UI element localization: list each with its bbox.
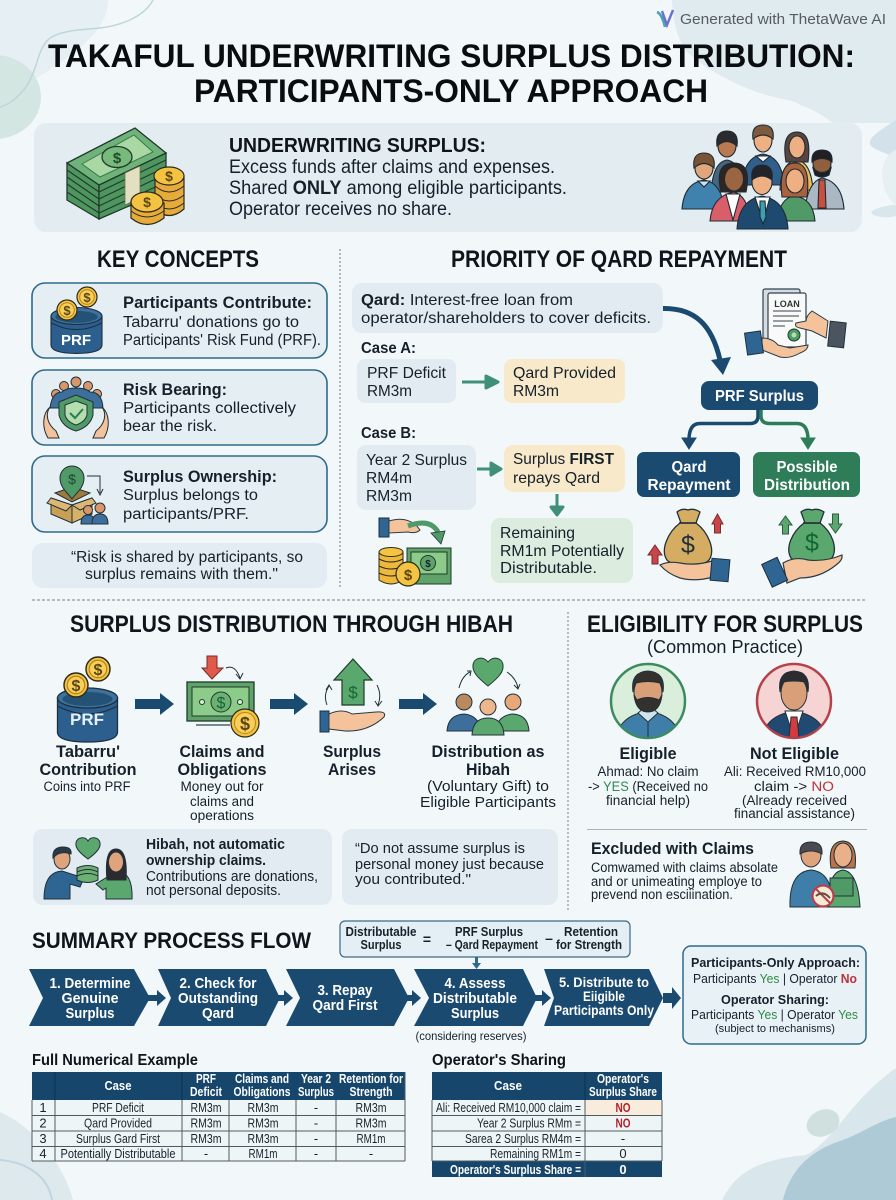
icon: excluded pair	[790, 841, 860, 907]
heading: (Common Practice)	[647, 637, 803, 657]
step 2: 2. Check for	[180, 975, 257, 992]
node: possible distribution	[753, 452, 860, 497]
callout: risk quote: surplus remains with them."	[85, 566, 278, 583]
icon: cash and coins: $	[143, 194, 151, 210]
arrows: branches to repayment and distribution	[682, 410, 815, 449]
formula box: Surplus	[360, 938, 402, 952]
watermark: Generated with ThetaWave AI	[680, 11, 886, 28]
table: Qard Provided	[84, 1116, 152, 1130]
table: RM3m	[248, 1116, 278, 1130]
step: claims and obligations	[178, 656, 266, 823]
heading: Operator's Sharing	[432, 1052, 566, 1069]
icon: loan document and hands: LOAN	[774, 299, 800, 309]
card: participants contribute	[32, 283, 327, 358]
step 2	[158, 969, 280, 1026]
case A	[357, 340, 625, 403]
heading: KEY CONCEPTS	[97, 246, 259, 273]
definition: qard	[352, 283, 663, 333]
arrow	[147, 990, 166, 1006]
card text: Participants' Risk Fund (PRF).	[123, 332, 321, 349]
table: -	[314, 1131, 318, 1146]
formula box: Distributable	[346, 925, 417, 939]
node: possible distribution: Distribution	[764, 477, 850, 494]
table: Ali: Received RM10,000 claim =	[436, 1100, 581, 1115]
panel: surplus distribution through hibah	[33, 611, 558, 905]
icon: group of participants	[682, 125, 844, 229]
node: qard repayment: Repayment	[648, 477, 731, 494]
icon: hand placing cash and coins: $	[404, 567, 413, 584]
step: claims and obligations: $	[240, 714, 250, 734]
text: not eligible: (Already received	[742, 793, 847, 808]
table: Case	[494, 1079, 522, 1093]
table: RM3m	[190, 1116, 222, 1130]
table: RM3m	[356, 1100, 386, 1115]
case B: repays Qard	[513, 470, 600, 487]
arrow	[399, 693, 437, 715]
table: RM3m	[356, 1116, 386, 1130]
table: -	[369, 1146, 373, 1161]
step 5: 5. Distribute to	[559, 975, 649, 990]
table: -	[204, 1146, 208, 1161]
formula box: PRF Surplus	[455, 925, 523, 939]
table: Case	[104, 1079, 132, 1093]
arrow	[663, 987, 681, 1009]
table: Operator's Surplus Share =	[450, 1162, 581, 1177]
table: -	[314, 1146, 318, 1161]
table: Year 2	[301, 1072, 331, 1086]
text: not eligible: Ali: Received RM10,000	[724, 764, 866, 779]
case B: Case B:	[361, 425, 416, 442]
icon: PRF fund with coins	[51, 287, 102, 353]
heading	[587, 611, 863, 657]
step: claims and obligations: Claims and	[180, 742, 264, 761]
text: eligible: financial help)	[606, 793, 690, 808]
title	[48, 38, 855, 109]
step 3: 3. Repay	[318, 982, 373, 999]
card: risk bearing	[32, 370, 327, 445]
text: not eligible: Not Eligible	[750, 744, 839, 763]
step: claims and obligations: Money out for	[180, 779, 264, 794]
table: RM3m	[248, 1131, 278, 1146]
case B: Remaining	[500, 525, 575, 542]
comparison box: Participants-Only Approach:	[691, 955, 860, 970]
step: claims and obligations: claims and	[190, 794, 254, 809]
panel: eligibility for surplus	[587, 611, 867, 907]
text: eligible: -> YES (Received no	[588, 779, 708, 794]
arrow	[535, 990, 551, 1006]
case B: RM3m	[366, 488, 412, 505]
text block: underwriting surplus: Shared ONLY among eligible participants.	[229, 178, 567, 199]
step 4	[414, 969, 537, 1026]
callout: do not assume quote: personal money just because	[355, 856, 544, 873]
text: eligible: Ahmad: No claim	[598, 764, 698, 779]
icon: money bag repayment	[648, 509, 730, 582]
table: -	[621, 1131, 625, 1146]
callout: do not assume quote	[342, 829, 558, 905]
card text: Surplus belongs to	[123, 487, 258, 504]
callout: risk quote	[32, 543, 327, 588]
step 2: Qard	[202, 1005, 234, 1022]
callout: do not assume quote: you contributed."	[355, 871, 471, 888]
step 1: 1. Determine	[50, 975, 130, 992]
step 5	[544, 969, 663, 1026]
step: distribution as hibah: Hibah	[466, 760, 510, 779]
text: not eligible: financial assistance)	[734, 806, 855, 821]
formula box	[340, 921, 630, 957]
card text: Participants collectively	[123, 400, 296, 417]
arrow	[135, 693, 174, 715]
panel: priority of qard repayment	[352, 246, 860, 587]
text: excluded with claims	[591, 839, 778, 902]
card text	[123, 380, 296, 435]
step 4: Distributable	[433, 990, 517, 1007]
panel: summary process flow	[29, 921, 866, 1044]
table: NO	[616, 1100, 630, 1115]
step: claims and obligations: $	[217, 695, 226, 712]
table: Deficit	[190, 1085, 223, 1099]
case B: Surplus FIRST	[513, 451, 614, 468]
panel: full numerical example	[32, 1052, 405, 1161]
heading: Full Numerical Example	[32, 1052, 198, 1069]
callout text: not personal deposits.	[146, 883, 281, 899]
callout: risk quote: “Risk is shared by participants, so	[71, 549, 303, 566]
heading: ELIGIBILITY FOR SURPLUS	[587, 611, 863, 638]
arrow: formula to step 4	[472, 957, 481, 969]
text: not eligible: claim -> NO	[754, 779, 834, 794]
step 4: Surplus	[451, 1005, 499, 1022]
case B: RM1m Potentially	[500, 543, 624, 560]
heading: PRIORITY OF QARD REPAYMENT	[451, 246, 787, 273]
heading: SURPLUS DISTRIBUTION THROUGH HIBAH	[70, 611, 513, 638]
step: surplus arises: $	[348, 683, 358, 702]
avatar: eligible	[611, 664, 685, 740]
icon: money bag repayment: $	[681, 531, 695, 559]
avatar: not eligible	[757, 664, 831, 740]
case B	[357, 425, 633, 583]
step 3	[286, 969, 409, 1026]
formula box: =	[423, 931, 431, 947]
table: Surplus Share	[589, 1085, 657, 1099]
step: surplus arises: Arises	[328, 760, 376, 779]
step: tabarru contribution: $	[94, 662, 103, 679]
arrow	[406, 990, 421, 1006]
text: eligible	[588, 744, 708, 808]
step: surplus arises: Surplus	[323, 742, 381, 761]
panel: operator's sharing	[432, 1052, 662, 1177]
table: Year 2 Surplus RMm =	[477, 1116, 581, 1130]
formula box: – Qard Repayment	[446, 938, 539, 952]
callout: hibah not ownership	[33, 829, 332, 905]
node: possible distribution: Possible	[776, 459, 838, 476]
case A: RM3m	[367, 383, 412, 400]
table: 1	[39, 1100, 47, 1115]
callout: do not assume quote: “Do not assume surplus is	[355, 840, 525, 857]
node: qard repayment: Qard	[672, 459, 706, 476]
comparison box: Participants Yes | Operator Yes	[691, 1008, 858, 1022]
text block: underwriting surplus: UNDERWRITING SURPLUS:	[229, 135, 486, 157]
text block: underwriting surplus	[229, 135, 567, 220]
callout text: ownership claims.	[146, 852, 266, 869]
icon: cash and coins: $	[113, 150, 122, 167]
card text: bear the risk.	[123, 418, 217, 435]
comparison box: Operator Sharing:	[721, 992, 829, 1007]
icon: cash and coins	[67, 128, 184, 224]
formula box: for Strength	[556, 938, 622, 952]
step 5: Participants Only	[554, 1003, 654, 1018]
title: PARTICIPANTS-ONLY APPROACH	[194, 73, 708, 109]
card text	[123, 467, 277, 523]
icon: box with surplus pin and people: $	[68, 471, 76, 487]
comparison box: (subject to mechanisms)	[715, 1023, 835, 1035]
card text: participants/PRF.	[123, 506, 249, 523]
case B: Year 2 Surplus	[366, 452, 467, 469]
icon: hand placing cash and coins	[379, 518, 451, 586]
icon: two people exchanging gift	[44, 838, 132, 899]
step: distribution as hibah: Eligible Participants	[420, 795, 556, 811]
icon: PRF fund with coins: PRF	[61, 332, 91, 349]
comparison box: Participants Yes | Operator No	[693, 972, 857, 986]
card text: Tabarru' donations go to	[123, 314, 299, 331]
text: not eligible	[724, 744, 866, 821]
step: claims and obligations: operations	[190, 808, 254, 823]
card text: Participants Contribute:	[123, 293, 312, 312]
step: tabarru contribution: Tabarru'	[56, 742, 120, 761]
formula box: –	[545, 930, 553, 946]
table: 3	[39, 1131, 47, 1146]
table: 0	[619, 1162, 627, 1177]
step: distribution as hibah: (Voluntary Gift) to	[427, 779, 549, 795]
icon: PRF fund with coins: $	[83, 290, 91, 305]
table: -	[314, 1100, 318, 1115]
table: NO	[616, 1116, 630, 1130]
note: considering reserves: (considering reserves)	[416, 1029, 526, 1043]
step: claims and obligations: Obligations	[178, 760, 266, 779]
definition: qard: operator/shareholders to cover deficits.	[361, 310, 651, 327]
formula box: Retention	[564, 925, 618, 939]
table: PRF Deficit	[92, 1100, 144, 1115]
arrow	[278, 990, 293, 1006]
comparison box	[683, 946, 866, 1044]
table: Operator's	[597, 1072, 649, 1086]
card text: Risk Bearing:	[123, 380, 227, 399]
step 1: Surplus	[66, 1005, 114, 1022]
step: tabarru contribution: Coins into PRF	[44, 779, 130, 794]
callout text: Contributions are donations,	[146, 869, 318, 885]
title: TAKAFUL UNDERWRITING SURPLUS DISTRIBUTION:	[48, 38, 855, 74]
step: tabarru contribution: $	[72, 678, 81, 695]
node: qard repayment	[637, 452, 740, 497]
text: excluded with claims: Excluded with Claims	[591, 839, 754, 858]
icon: hand placing cash and coins: $	[425, 559, 431, 570]
panel: underwriting surplus	[34, 123, 862, 232]
callout text: Hibah, not automatic	[146, 836, 285, 853]
table: 4	[39, 1146, 47, 1161]
card: surplus ownership	[32, 456, 327, 532]
text: eligible: Eligible	[620, 744, 676, 763]
case B: RM4m	[366, 470, 412, 487]
step 1	[29, 969, 150, 1026]
table: Remaining RM1m =	[490, 1146, 581, 1161]
text block: underwriting surplus: Operator receives no share.	[229, 199, 452, 220]
table	[32, 1072, 405, 1161]
step 2: Outstanding	[178, 990, 258, 1007]
icon: money bag distribution: $	[805, 529, 819, 557]
table: RM3m	[190, 1131, 222, 1146]
step: tabarru contribution	[40, 657, 136, 794]
table: RM1m	[356, 1131, 386, 1146]
step 5: Eiigible	[583, 989, 625, 1004]
icon: cash and coins: $	[165, 168, 173, 184]
card text	[123, 293, 321, 349]
table: 0	[619, 1146, 627, 1161]
arrow: curved qard to PRF surplus	[663, 308, 731, 375]
step: surplus arises	[320, 659, 385, 779]
table	[432, 1072, 662, 1177]
case B: Distributable.	[500, 560, 597, 577]
table: RM3m	[248, 1100, 278, 1115]
table: Surplus	[298, 1085, 334, 1099]
table: -	[314, 1116, 318, 1130]
step 1: Genuine	[62, 990, 118, 1007]
table: Strength	[350, 1085, 392, 1099]
table: Retention for	[339, 1072, 403, 1086]
step: tabarru contribution: PRF	[70, 710, 104, 729]
case A: Case A:	[361, 340, 416, 357]
table: Sarea 2 Surplus RM4m =	[465, 1131, 581, 1146]
table: Potentially Distributable	[60, 1146, 176, 1161]
icon: shield with hands and people	[44, 377, 108, 438]
table: Claims and	[235, 1072, 289, 1086]
panel: key concepts	[32, 246, 327, 588]
text: excluded with claims: Comwamed with claims absolate	[591, 860, 778, 875]
card text: Surplus Ownership:	[123, 467, 277, 486]
step 3: Qard First	[312, 997, 378, 1014]
icon: loan document and hands	[745, 289, 846, 358]
step: distribution as hibah	[420, 658, 556, 811]
table: RM1m	[248, 1146, 278, 1161]
text: excluded with claims: prevend non esciiination.	[591, 887, 733, 902]
arrow	[270, 693, 308, 715]
table: Obligations	[234, 1085, 291, 1099]
text: excluded with claims: and or unimeating employe to	[591, 874, 762, 889]
callout text	[146, 836, 318, 899]
step: distribution as hibah: Distribution as	[432, 742, 544, 761]
definition: qard: Qard: Interest-free loan from	[361, 292, 573, 309]
table: PRF	[196, 1072, 216, 1086]
icon: PRF fund with coins: $	[63, 303, 71, 318]
step: tabarru contribution: Contribution	[40, 760, 136, 779]
table: 2	[39, 1116, 47, 1130]
table: RM3m	[190, 1100, 222, 1115]
icon: box with surplus pin and people	[47, 466, 108, 524]
heading: SUMMARY PROCESS FLOW	[32, 928, 311, 953]
icon: money bag distribution	[762, 509, 842, 587]
case A: Qard Provided	[513, 365, 616, 382]
case A: PRF Deficit	[367, 365, 447, 382]
node: PRF surplus: PRF Surplus	[715, 388, 804, 405]
case A: RM3m	[513, 383, 559, 400]
step 4: 4. Assess	[444, 975, 506, 992]
text block: underwriting surplus: Excess funds after claims and expenses.	[229, 157, 555, 178]
table: Surplus Gard First	[76, 1131, 160, 1146]
node: PRF surplus	[701, 381, 818, 410]
